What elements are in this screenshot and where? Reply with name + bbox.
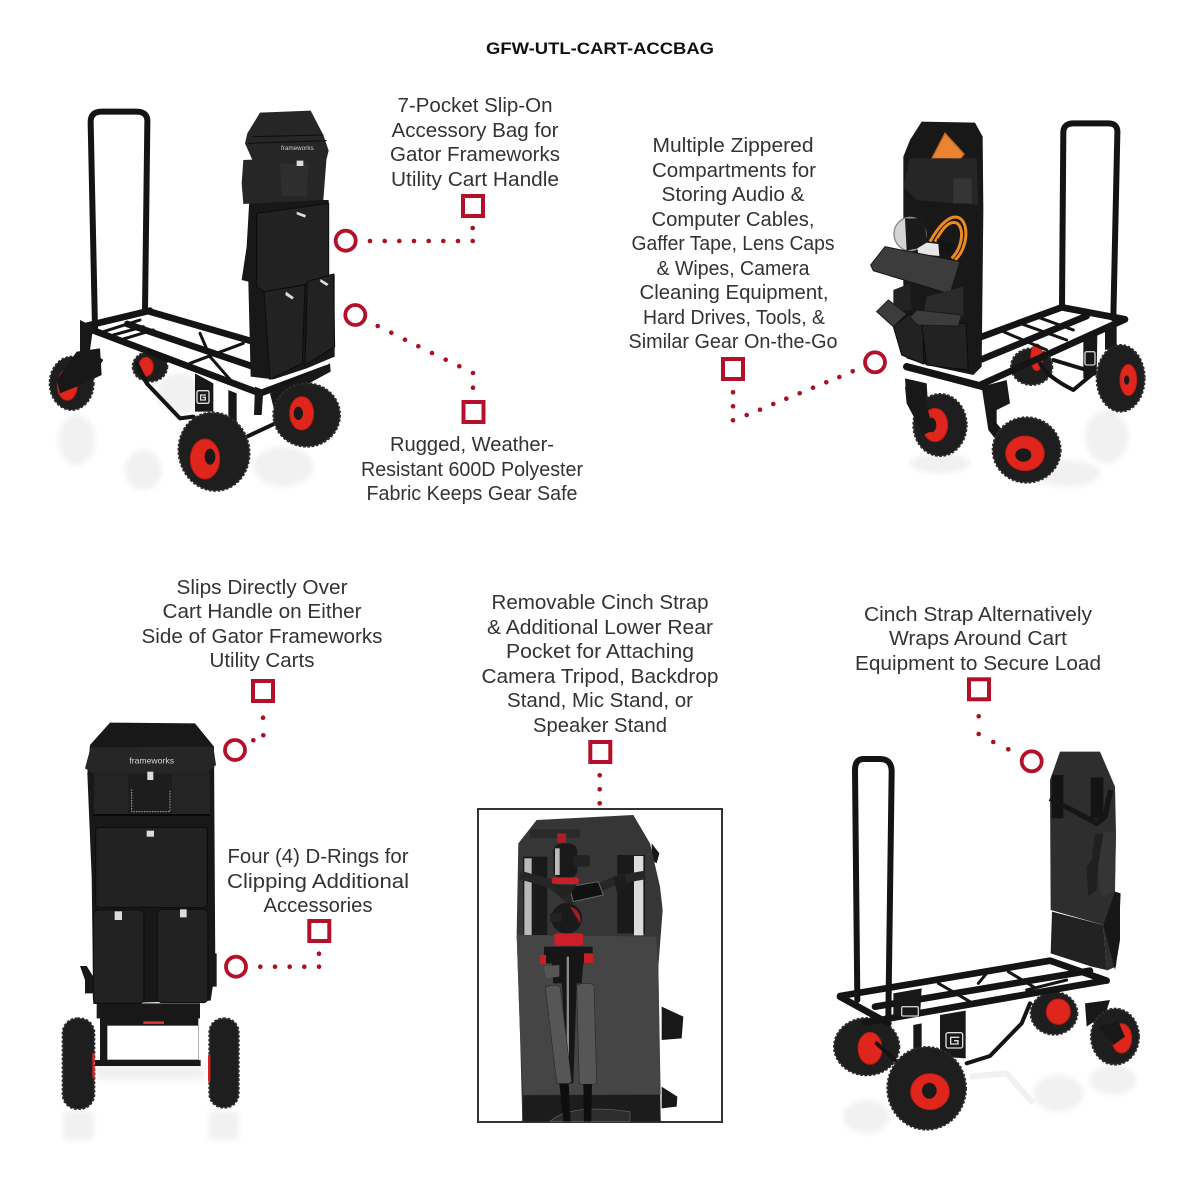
- orange cable coil: [930, 217, 966, 260]
- text: zippered compartments: Gaffer Tape, Lens Caps: [632, 233, 834, 255]
- text: cinch strap wraps: Cinch Strap Alternatively: [864, 604, 1092, 626]
- text: rugged fabric: Resistant 600D Polyester: [361, 459, 583, 481]
- text: cinch strap tripod: Camera Tripod, Backdrop: [482, 666, 718, 688]
- text: slips over handle: Slips Directly Over: [176, 577, 348, 599]
- text: slip-on accessory bag: Gator Frameworks: [390, 144, 560, 166]
- text: zippered compartments: & Wipes, Camera: [656, 258, 810, 280]
- text: slips over handle: [142, 577, 382, 672]
- text: zippered compartments: Storing Audio &: [662, 184, 805, 206]
- text: d-rings: Clipping Additional: [227, 871, 409, 893]
- gaffer tape roll: [894, 217, 926, 251]
- bag on cart: [242, 111, 335, 379]
- text: zippered compartments: Cleaning Equipment,: [640, 282, 828, 304]
- open flap: [871, 247, 960, 294]
- callout: bag slip-on: [336, 95, 560, 251]
- text: slip-on accessory bag: Accessory Bag for: [392, 120, 559, 142]
- text: zippered compartments: Multiple Zippered: [652, 135, 814, 157]
- text: slips over handle: Side of Gator Frameworks: [142, 626, 382, 648]
- cart photo: strap side view: [834, 752, 1139, 1133]
- text: cinch strap tripod: Stand, Mic Stand, or: [507, 690, 693, 712]
- cart photo: rear view with bag: [63, 723, 239, 1140]
- bag back panel with strap: [1050, 752, 1121, 971]
- text: cinch strap tripod: Speaker Stand: [533, 715, 667, 737]
- text: zippered compartments: Similar Gear On-the-Go: [628, 331, 838, 353]
- callout: slips over handle: [142, 577, 382, 760]
- tripod photo panel: [478, 809, 722, 1122]
- text: slips over handle: Utility Carts: [210, 650, 314, 672]
- text: rugged fabric: Fabric Keeps Gear Safe: [366, 483, 578, 505]
- callout: cinch strap tripod: [482, 592, 718, 806]
- text: cinch strap tripod: Pocket for Attaching: [506, 641, 694, 663]
- text: cinch strap tripod: Removable Cinch Strap: [492, 592, 708, 614]
- text: rugged fabric: [361, 434, 583, 505]
- text: slip-on accessory bag: [390, 95, 560, 191]
- callout: cinch strap wraps: [855, 604, 1101, 771]
- callout: d-rings: [226, 846, 409, 977]
- cart photo: open bag view: [871, 122, 1145, 487]
- text: cinch strap tripod: & Additional Lower Rear: [487, 617, 713, 639]
- title: GFW-UTL-CART-ACCBAG: [486, 39, 714, 58]
- cart photo: side view with bag: [50, 111, 340, 497]
- text: d-rings: Four (4) D-Rings for: [228, 846, 409, 868]
- text: slips over handle: Cart Handle on Either: [162, 601, 362, 623]
- text: cinch strap wraps: [855, 604, 1101, 675]
- bag on cart: frameworks: [281, 145, 314, 152]
- text: zippered compartments: Hard Drives, Tools, &: [643, 307, 826, 329]
- text: cinch strap wraps: Wraps Around Cart: [889, 628, 1067, 650]
- text: d-rings: Accessories: [264, 895, 372, 917]
- text: d-rings: [227, 846, 409, 917]
- bag rear panel: [85, 723, 216, 1004]
- callout: rugged fabric: [345, 305, 583, 505]
- callout: zippered compartments: [628, 135, 885, 423]
- text: slip-on accessory bag: 7-Pocket Slip-On: [398, 95, 552, 117]
- text: cinch strap tripod: [482, 592, 718, 737]
- bag logo: frameworks: [129, 755, 175, 765]
- text: cinch strap wraps: Equipment to Secure Load: [855, 653, 1101, 675]
- orange hard drive: [932, 133, 964, 159]
- text: zippered compartments: Computer Cables,: [652, 209, 814, 231]
- text: rugged fabric: Rugged, Weather-: [390, 434, 554, 456]
- text: zippered compartments: [628, 135, 838, 353]
- open bag with gear: [871, 122, 983, 375]
- text: slip-on accessory bag: Utility Cart Handle: [391, 169, 559, 191]
- text: zippered compartments: Compartments for: [652, 160, 816, 182]
